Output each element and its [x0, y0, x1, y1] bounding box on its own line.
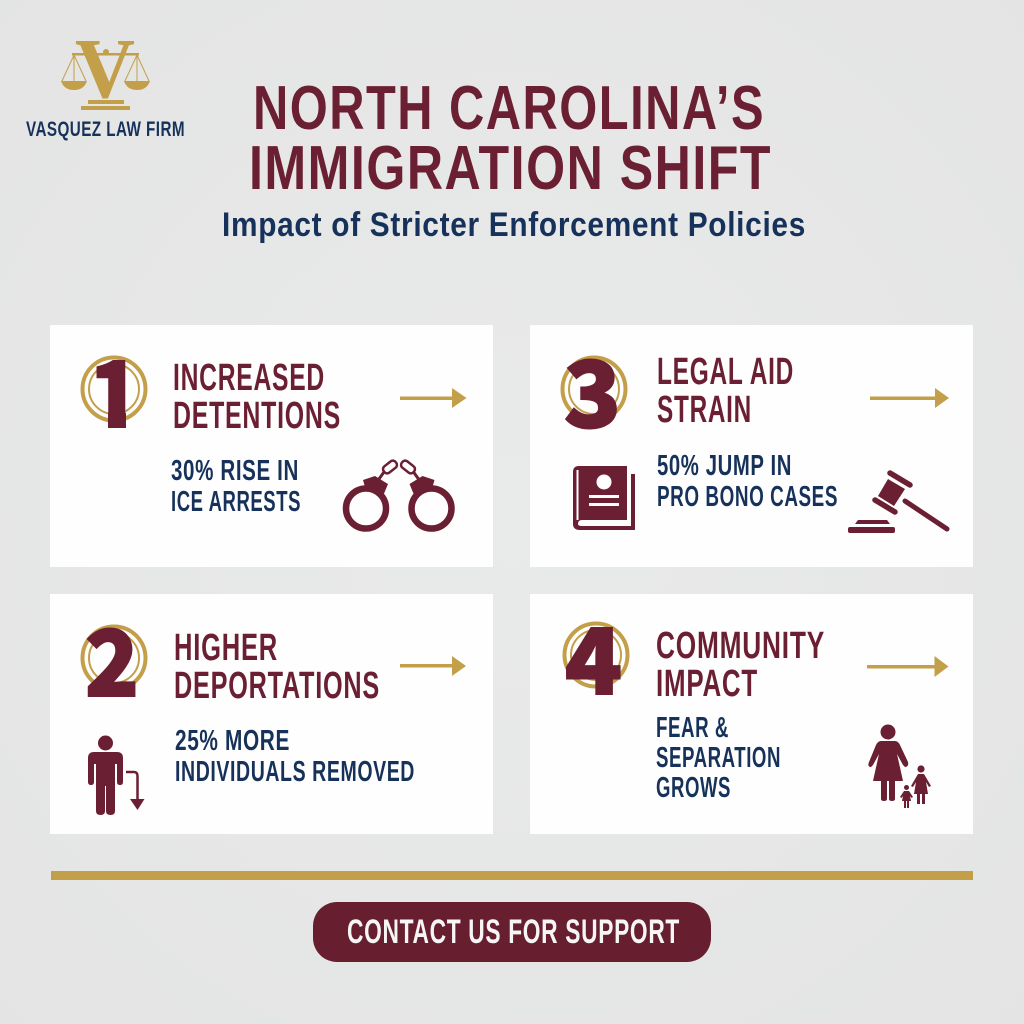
stat text: ICE ARRESTS — [171, 486, 301, 518]
icon: person with down arrow — [88, 736, 144, 815]
heading — [173, 357, 341, 437]
heading: INCREASED — [173, 357, 325, 399]
heading — [656, 625, 825, 705]
panel: community impact — [530, 589, 973, 834]
icon: gavel — [848, 473, 947, 533]
number badge 1: 1 — [89, 322, 141, 454]
heading: STRAIN — [657, 389, 752, 431]
title: NORTH CAROLINA’S — [253, 74, 765, 143]
subtitle: Impact of Stricter Enforcement Policies — [222, 206, 806, 244]
icon: law book — [573, 466, 635, 530]
icon: scales of justice: V — [75, 20, 135, 116]
icon: mother and children — [868, 724, 931, 808]
heading — [657, 351, 794, 431]
title: IMMIGRATION SHIFT — [249, 134, 772, 203]
heading: DETENTIONS — [173, 395, 341, 437]
stat text: FEAR & — [656, 712, 729, 744]
number badge 4: 4 — [565, 589, 622, 721]
call to action button — [313, 902, 711, 962]
heading: LEGAL AID — [657, 351, 794, 393]
title — [249, 74, 772, 203]
panel: legal aid strain — [530, 322, 973, 567]
stat text: 50% JUMP IN — [657, 450, 792, 482]
stat text — [656, 712, 781, 804]
heading: HIGHER — [174, 627, 278, 669]
heading — [174, 627, 380, 707]
stat text: 30% RISE IN — [171, 455, 299, 487]
arrow — [400, 388, 466, 408]
number badge 2: 2 — [85, 591, 139, 723]
stat text — [657, 450, 838, 513]
arrow — [400, 656, 466, 676]
stat text: INDIVIDUALS REMOVED — [175, 756, 415, 788]
call to action button: CONTACT US FOR SUPPORT — [347, 913, 680, 951]
heading: COMMUNITY — [656, 625, 825, 667]
panel: increased detentions — [50, 322, 493, 567]
heading: DEPORTATIONS — [174, 665, 380, 707]
panel: higher deportations — [50, 591, 493, 834]
stat text: PRO BONO CASES — [657, 481, 838, 513]
stat text: SEPARATION — [656, 742, 781, 774]
stat text: GROWS — [656, 772, 731, 804]
number badge 1 — [80, 356, 148, 428]
logo: Vasquez Law Firm — [26, 20, 185, 141]
stat text — [175, 725, 415, 788]
heading: IMPACT — [656, 663, 758, 705]
logo wordmark: VASQUEZ LAW FIRM — [26, 118, 185, 141]
arrow — [867, 656, 948, 677]
icon: scales of justice — [61, 20, 150, 116]
arrow — [870, 388, 949, 408]
stat text: 25% MORE — [175, 725, 290, 757]
icon: handcuffs — [346, 459, 452, 528]
stat text — [171, 455, 301, 518]
number badge 3: 3 — [564, 322, 621, 454]
gold divider bar — [51, 871, 973, 880]
